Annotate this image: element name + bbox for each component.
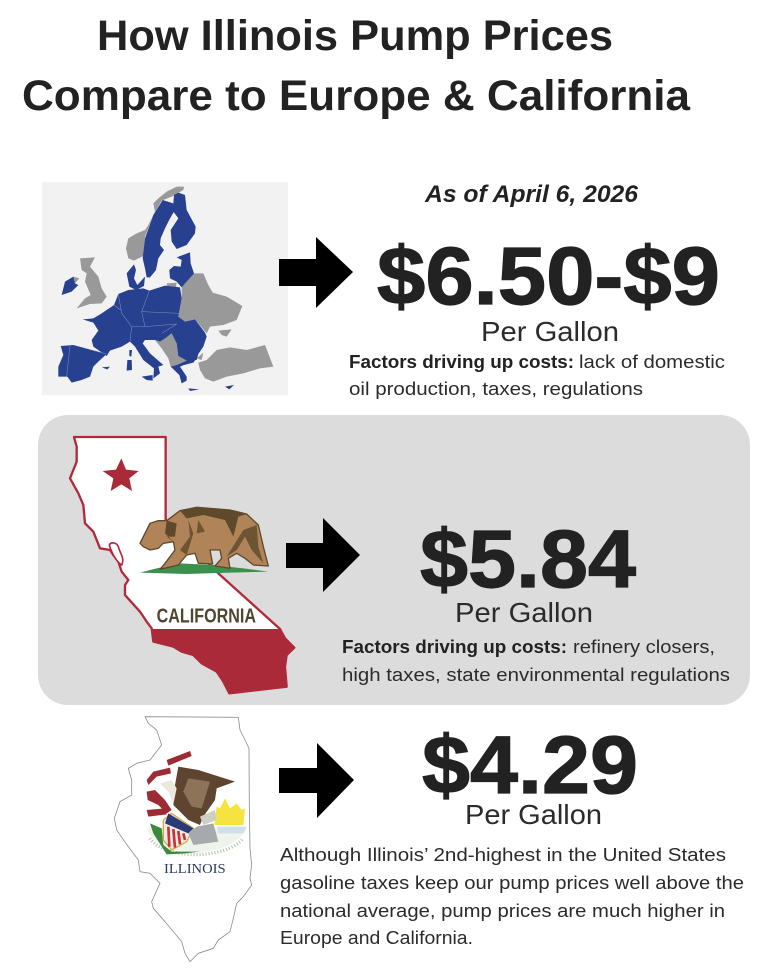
text: Illinois explanation — [280, 845, 744, 948]
arrow: Europe to price — [279, 237, 353, 308]
icon: Illinois state flag map — [114, 717, 252, 962]
text: Illinois explanation: Although Illinois’ 2nd-highest in the United States — [280, 845, 726, 865]
title — [22, 12, 691, 120]
title: How Illinois Pump Prices — [97, 12, 613, 60]
price: California: $5.84 — [420, 514, 636, 605]
per gallon: Illinois: Per Gallon — [465, 799, 602, 830]
icon: Illinois state flag map: ILLINOIS — [164, 862, 226, 877]
text: Illinois explanation: Europe and California. — [280, 928, 473, 948]
arrow: California to price — [286, 518, 360, 592]
arrow: Illinois to price — [279, 743, 354, 818]
text: Illinois explanation: gasoline taxes keep our pump prices well above the — [280, 873, 744, 893]
icon: California state flag map — [70, 437, 294, 693]
text: Europe cost factors: Factors driving up costs: — [349, 352, 574, 372]
text: Europe cost factors: lack of domestic — [579, 352, 725, 372]
price: Europe: $6.50-$9 — [377, 231, 720, 322]
panel: Europe map — [42, 182, 288, 395]
panel: California background — [38, 415, 750, 705]
icon: California state flag map: CALIFORNIA — [157, 605, 256, 627]
per gallon: Europe: Per Gallon — [481, 316, 619, 347]
price: Illinois: $4.29 — [422, 720, 638, 811]
per gallon: California: Per Gallon — [455, 597, 593, 628]
text: California cost factors: high taxes, state environmental regulations — [342, 665, 730, 685]
text: Europe cost factors — [349, 352, 725, 399]
date label: As of April 6, 2026 — [424, 181, 639, 208]
text: Europe cost factors: oil production, taxes, regulations — [349, 379, 643, 399]
text: California cost factors — [342, 637, 730, 685]
text: California cost factors: Factors driving up costs: — [342, 637, 567, 657]
text: California cost factors: refinery closers, — [573, 637, 715, 657]
title: Compare to Europe & California — [22, 72, 691, 120]
text: Illinois explanation: national average, pump prices are much higher in — [280, 901, 725, 921]
